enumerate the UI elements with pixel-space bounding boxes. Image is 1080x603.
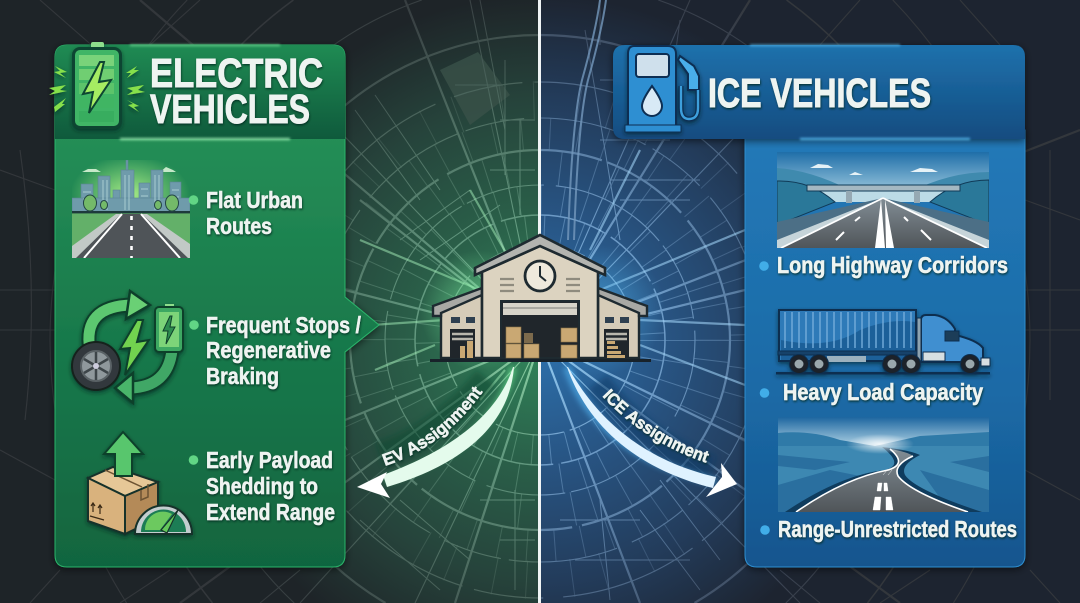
warehouse hub	[420, 235, 665, 375]
ICE header band	[613, 45, 1025, 139]
ICE title: ICE VEHICLES	[708, 70, 931, 116]
label: ICE Assignment: ICE Assignment	[602, 388, 710, 466]
label: frequent stops regenerative braking: Regenerative	[206, 337, 331, 363]
center divider line	[538, 0, 541, 603]
label: flat urban routes	[206, 187, 303, 239]
label: long highway corridors: Long Highway Corridors	[777, 252, 1008, 278]
EV panel body and pointer	[55, 45, 379, 567]
EV header band	[55, 45, 345, 139]
EV title	[150, 50, 323, 132]
EV title: VEHICLES	[150, 86, 310, 132]
item: range-unrestricted routes	[760, 417, 1017, 542]
label: range-unrestricted routes: Range-Unrestricted Routes	[778, 516, 1017, 542]
label: flat urban routes: Routes	[206, 213, 272, 239]
arrow: EV assignment	[357, 364, 519, 498]
icon: regenerative braking cycle	[72, 291, 183, 403]
label: flat urban routes: Flat Urban	[206, 187, 303, 213]
ICE panel body	[745, 130, 1025, 567]
label: frequent stops regenerative braking: Braking	[206, 363, 279, 389]
panel: electric vehicles	[49, 42, 379, 567]
panel: ICE vehicles	[613, 44, 1025, 567]
EV title: ELECTRIC	[150, 50, 323, 96]
label: frequent stops regenerative braking	[206, 312, 362, 389]
arrow: ICE assignment	[562, 364, 737, 497]
item: long highway corridors	[759, 152, 1008, 278]
icon: box with arrow and gauge	[88, 432, 192, 534]
label: EV Assignment: EV Assignment	[382, 386, 484, 468]
label: early payload shedding: Shedding to	[206, 473, 318, 499]
bullet	[189, 195, 198, 205]
bullet	[189, 320, 199, 330]
icon: battery with bolt	[49, 42, 145, 129]
label: heavy load capacity: Heavy Load Capacity	[783, 379, 983, 405]
bullet	[760, 388, 769, 398]
item: early payload shedding	[88, 432, 335, 534]
label: early payload shedding	[206, 447, 335, 525]
label: frequent stops regenerative braking: Frequent Stops /	[206, 312, 362, 338]
item: heavy load capacity	[760, 310, 990, 405]
label: early payload shedding: Extend Range	[206, 499, 335, 525]
item: flat urban routes	[70, 155, 303, 258]
illustration: highway with overpass	[777, 152, 989, 248]
bullet	[189, 455, 198, 465]
label: early payload shedding: Early Payload	[206, 447, 333, 473]
bullet	[759, 261, 769, 271]
illustration: city road	[70, 155, 190, 258]
illustration: semi truck	[776, 310, 990, 374]
illustration: open winding road	[778, 417, 989, 512]
bullet	[760, 525, 770, 535]
icon: fuel pump	[625, 46, 699, 132]
item: frequent stops	[72, 291, 362, 403]
